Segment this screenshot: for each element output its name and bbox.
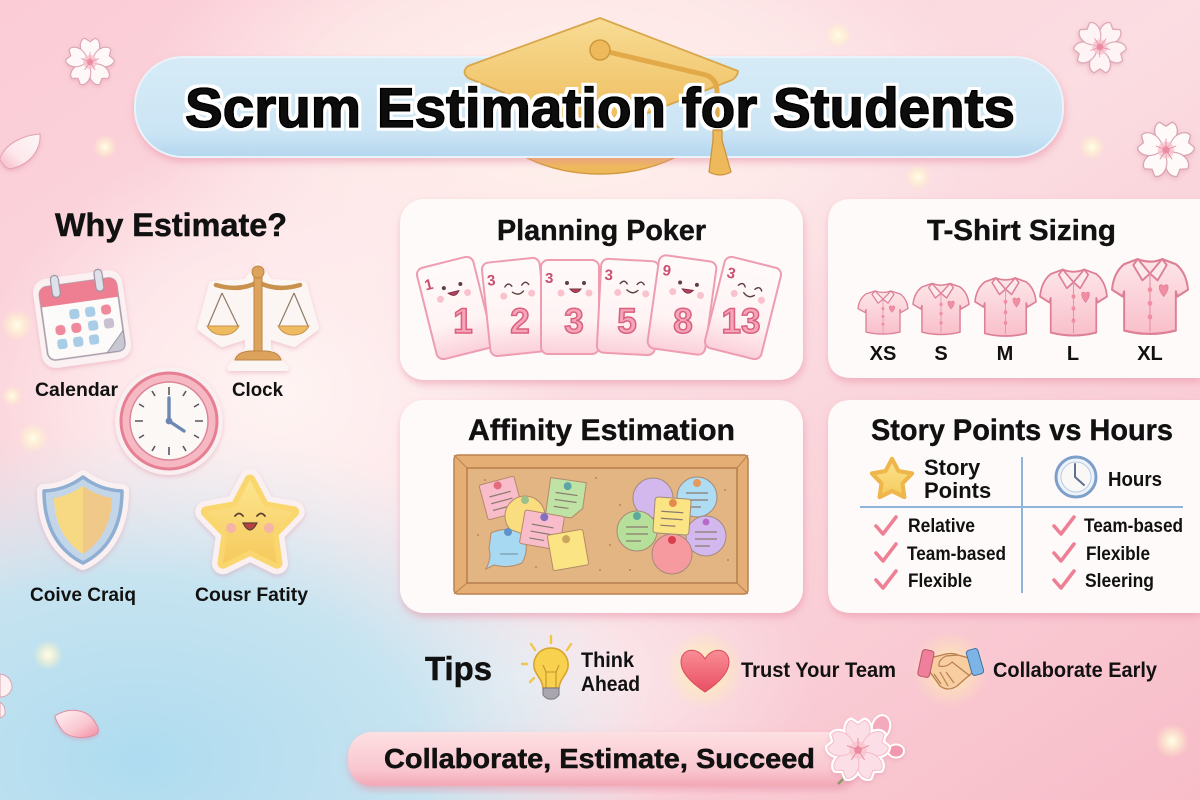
poker card 6: 3 <box>725 264 737 283</box>
icon: heart <box>665 630 745 710</box>
heading: story points vs hours: Story Points vs Hours <box>871 414 1173 447</box>
shirt M <box>975 278 1036 365</box>
shirt XL: XL <box>1137 343 1163 365</box>
title: Scrum Estimation for Students <box>185 76 1015 139</box>
card background <box>400 199 803 380</box>
icon: balance scale <box>200 266 316 368</box>
icon: handshake <box>912 632 988 708</box>
table dividers <box>860 457 1183 593</box>
poker card 3: 3 <box>564 302 584 341</box>
panel: story points vs hours <box>828 400 1200 613</box>
poker card 5: 8 <box>673 302 693 341</box>
title banner <box>135 18 1063 175</box>
heading: planning poker: Planning Poker <box>497 215 706 247</box>
sticky notes: clustered group <box>617 477 726 574</box>
poker card 5 <box>647 254 717 356</box>
sticky notes: scattered group <box>479 476 589 571</box>
poker card 1 <box>415 255 495 361</box>
card background <box>828 199 1200 378</box>
title pill <box>135 57 1063 157</box>
shirt XS <box>858 291 908 365</box>
poker card 6: 13 <box>722 302 760 341</box>
card background <box>828 400 1200 613</box>
panel: why estimate <box>30 207 316 606</box>
icon: hours clock <box>1056 457 1096 497</box>
icon: smiling star <box>206 480 294 563</box>
label: calendar: Calendar <box>35 380 119 401</box>
shirt L <box>1040 270 1107 365</box>
card background <box>400 400 803 613</box>
tip text: collaborate early: Collaborate Early <box>993 659 1157 682</box>
story points list: Flexible <box>908 571 972 592</box>
shirt XL <box>1112 259 1188 365</box>
shirt XS: XS <box>870 343 896 365</box>
decorative petals <box>0 134 98 737</box>
tip text: think ahead: Ahead <box>581 673 640 696</box>
hours list <box>1054 516 1183 592</box>
poker card 1: 1 <box>453 302 473 341</box>
poker card 3 <box>541 260 599 354</box>
poker card 6 <box>703 255 783 361</box>
footer banner <box>348 713 904 786</box>
shirt L: L <box>1067 343 1079 365</box>
icon: cherry blossom <box>826 713 904 784</box>
heading: affinity estimation: Affinity Estimation <box>468 414 735 447</box>
shirt S <box>913 283 969 365</box>
column header: hours: Hours <box>1108 469 1162 491</box>
hours list: Sleering <box>1085 571 1154 592</box>
heading: tips: Tips <box>425 650 492 687</box>
shirt M: M <box>997 343 1013 365</box>
hours list: Flexible <box>1086 544 1150 565</box>
tips row <box>425 630 1157 710</box>
label: star caption: Cousr Fatity <box>195 585 308 606</box>
corkboard <box>454 455 748 594</box>
panel: t-shirt sizing <box>828 199 1200 378</box>
tip text: trust your team: Trust Your Team <box>741 659 896 682</box>
icon: star <box>872 459 912 497</box>
panel: affinity estimation <box>400 400 803 613</box>
poker card 4: 5 <box>617 302 637 341</box>
hours list: Team-based <box>1084 516 1183 537</box>
poker card 4 <box>597 259 659 355</box>
column header: story points: Story <box>924 455 981 480</box>
icon: wall clock <box>115 367 223 475</box>
poker card 2: 3 <box>486 272 496 290</box>
icon: light bulb <box>522 636 571 699</box>
icon: calendar <box>31 266 133 370</box>
footer text: Collaborate, Estimate, Succeed <box>384 743 815 774</box>
poker card 5: 9 <box>661 262 672 280</box>
story points list: Relative <box>908 516 975 537</box>
column header: story points: Points <box>924 478 991 503</box>
poker card 2 <box>481 257 549 357</box>
poker card 3: 3 <box>545 270 553 287</box>
poker card 1: 1 <box>423 276 435 294</box>
poker card 2: 2 <box>510 302 530 341</box>
heading: t-shirt sizing: T-Shirt Sizing <box>927 215 1116 247</box>
icon: graduation cap top <box>464 18 738 132</box>
icon: graduation cap base <box>527 150 674 174</box>
icon: shield <box>44 477 122 563</box>
poker card 4: 3 <box>604 267 613 284</box>
tip text: think ahead: Think <box>581 649 634 672</box>
story points list: Team-based <box>907 544 1006 565</box>
label: clock: Clock <box>232 380 283 401</box>
icon: tassel <box>709 130 731 175</box>
label: shield caption: Coive Craiq <box>30 585 136 606</box>
panel: planning poker <box>400 199 803 380</box>
footer pill <box>348 732 858 786</box>
shirt S: S <box>934 343 948 365</box>
story points list <box>876 516 1006 592</box>
heading: why estimate: Why Estimate? <box>55 207 287 243</box>
